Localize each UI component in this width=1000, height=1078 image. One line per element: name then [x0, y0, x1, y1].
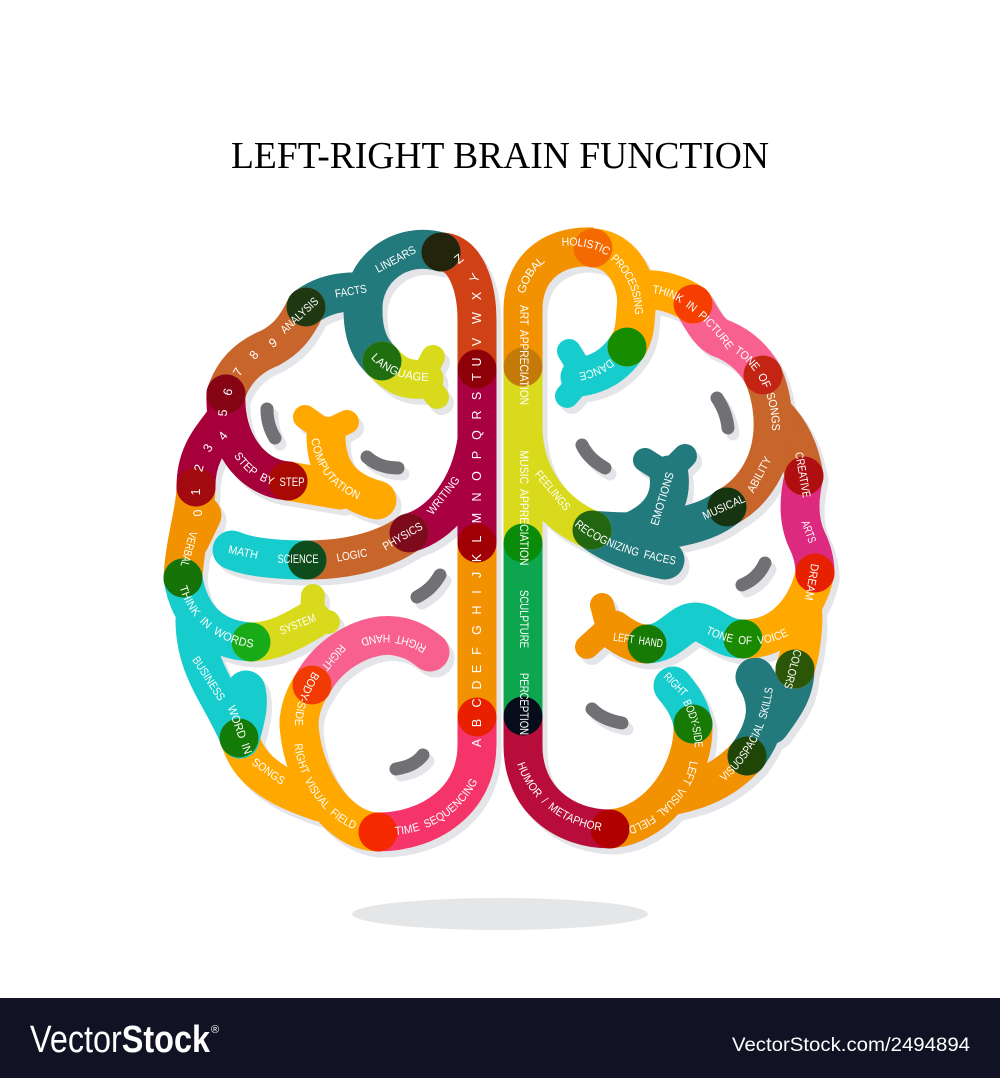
left hemisphere labels: SONGS — [249, 756, 287, 788]
right hemisphere labels: LEFT HAND — [612, 632, 664, 650]
alphabet along left spine: X — [470, 291, 484, 300]
alphabet along left spine: J — [470, 572, 484, 578]
alphabet along left spine: S — [470, 392, 484, 400]
right hemisphere node circles — [504, 228, 834, 848]
left hemisphere node circles — [164, 232, 496, 852]
digits along left ribbon — [189, 335, 280, 517]
left hemisphere labels: RIGHT — [319, 642, 347, 672]
alphabet along left spine: Q — [470, 430, 484, 440]
left hemisphere labels: WRITING — [425, 475, 463, 517]
left hemisphere labels: STEP BY — [234, 452, 275, 484]
left hemisphere labels: LANGUAGE — [371, 353, 428, 381]
right hemisphere labels: EMOTIONS — [649, 471, 677, 527]
alphabet along left spine: Z — [452, 251, 467, 267]
title: LEFT-RIGHT BRAIN FUNCTION — [231, 135, 769, 177]
left hemisphere labels: LOGIC — [336, 547, 368, 565]
footer bar — [0, 998, 1000, 1078]
alphabet along left spine: M — [470, 513, 484, 523]
digits along left ribbon: 4 — [215, 429, 231, 443]
right hemisphere labels: HOLISTIC — [562, 238, 610, 254]
alphabet along left spine: K — [470, 553, 484, 562]
footer logo: VectorStock — [30, 1019, 211, 1061]
left hemisphere labels: ANALYSIS — [279, 295, 321, 336]
left hemisphere labels — [177, 244, 476, 835]
alphabet along left spine: A — [470, 738, 484, 747]
right hemisphere labels: LEFT VISUAL FIELD — [629, 762, 698, 834]
left hemisphere — [164, 230, 502, 858]
right hemisphere labels: ART APPRECIATION — [517, 305, 529, 405]
right hemisphere labels: MUSICAL — [701, 493, 747, 523]
left hemisphere labels: RIGHT HAND — [362, 634, 426, 653]
right hemisphere labels: COLORS — [781, 648, 803, 690]
digits along left ribbon: 5 — [216, 409, 230, 417]
right hemisphere labels: RIGHT — [661, 671, 689, 699]
alphabet along left spine: D — [470, 680, 484, 690]
digits along left ribbon: 7 — [230, 365, 246, 379]
alphabet along left spine: W — [470, 312, 484, 324]
right hemisphere labels: PROCESSING — [610, 254, 643, 314]
left hemisphere labels: STEP — [280, 477, 305, 489]
alphabet along left spine: P — [470, 451, 484, 459]
right hemisphere labels: DANCE — [579, 359, 614, 380]
right hemisphere ribbons — [523, 247, 815, 829]
digits along left ribbon: 0 — [191, 509, 205, 517]
alphabet along left spine: V — [470, 337, 484, 346]
digits along left ribbon: 3 — [200, 441, 216, 455]
right hemisphere labels: CREATIVE — [792, 451, 812, 499]
left hemisphere labels: LINEARS — [374, 244, 418, 276]
digits along left ribbon: 1 — [189, 488, 203, 495]
digits along left ribbon: 2 — [191, 463, 207, 473]
left hemisphere labels: BODY-SIDE — [294, 672, 320, 726]
right hemisphere labels: THINK IN PICTURE — [653, 285, 734, 350]
digits along left ribbon: 8 — [246, 348, 262, 362]
alphabet along left spine: I — [470, 590, 484, 594]
digits along left ribbon: 9 — [266, 335, 280, 351]
floor shadow ellipse — [352, 898, 648, 930]
right hemisphere labels: FEELINGS — [532, 469, 572, 513]
right hemisphere labels — [517, 238, 820, 834]
alphabet along left spine: F — [470, 647, 484, 655]
digits along left ribbon: 6 — [220, 387, 236, 397]
left hemisphere labels: MATH — [227, 544, 259, 562]
alphabet along left spine: R — [470, 410, 484, 420]
alphabet along left spine: O — [470, 471, 484, 481]
left hemisphere labels: PHYSICS — [381, 521, 425, 553]
alphabet along left spine: L — [470, 535, 484, 542]
right hemisphere — [504, 227, 840, 854]
left hemisphere labels: BUSINESS — [189, 655, 227, 703]
right hemisphere labels: PERCEPTION — [517, 673, 529, 735]
registered mark: ® — [211, 1024, 219, 1036]
left hemisphere labels: SCIENCE — [278, 554, 319, 566]
alphabet along left spine: C — [470, 698, 484, 708]
right hemisphere labels: ABILITY — [746, 455, 775, 495]
alphabet along left spine: N — [470, 492, 484, 502]
right hemisphere labels: GOBAL — [518, 258, 545, 293]
alphabet along left spine: T — [470, 373, 484, 381]
left hemisphere labels: FACTS — [334, 283, 368, 301]
alphabet along left spine: U — [470, 357, 484, 367]
alphabet along left spine: Y — [467, 271, 483, 285]
footer image id: VectorStock.com/2494894 — [732, 1034, 970, 1056]
alphabet along left spine: E — [470, 665, 484, 673]
right hemisphere labels: TONE OF SONGS — [736, 346, 780, 430]
right hemisphere labels: SCULPTURE — [517, 590, 529, 648]
right hemisphere labels: MUSIC APPRECIATION — [517, 450, 529, 566]
right hemisphere labels: ARTS — [798, 519, 818, 545]
alphabet along left spine: G — [470, 625, 484, 635]
left hemisphere ribbons — [183, 249, 477, 832]
alphabet along left spine — [452, 251, 484, 747]
right hemisphere labels: DREAM — [802, 563, 820, 601]
left hemisphere labels: RIGHT VISUAL FIELD — [294, 744, 356, 828]
right hemisphere labels: RECOGNIZING FACES — [574, 520, 676, 564]
right hemisphere labels: HUMOR / METAPHOR — [517, 762, 602, 831]
right hemisphere labels: TONE OF VOICE — [708, 626, 788, 644]
left hemisphere labels: VERBAL — [177, 530, 198, 568]
left hemisphere labels: THINK IN WORDS — [180, 584, 254, 648]
left hemisphere labels: COMPUTATION — [312, 438, 360, 500]
right hemisphere labels: VISUOSPACIAL SKILLS — [719, 688, 773, 780]
left hemisphere labels: TIME SEQUENCING — [394, 779, 476, 835]
right hemisphere labels: BODY-SIDE — [683, 699, 703, 748]
alphabet along left spine: B — [470, 719, 484, 727]
left hemisphere labels: WORD IN — [225, 704, 253, 756]
left hemisphere labels: SYSTEM — [278, 612, 318, 638]
alphabet along left spine: H — [470, 605, 484, 615]
